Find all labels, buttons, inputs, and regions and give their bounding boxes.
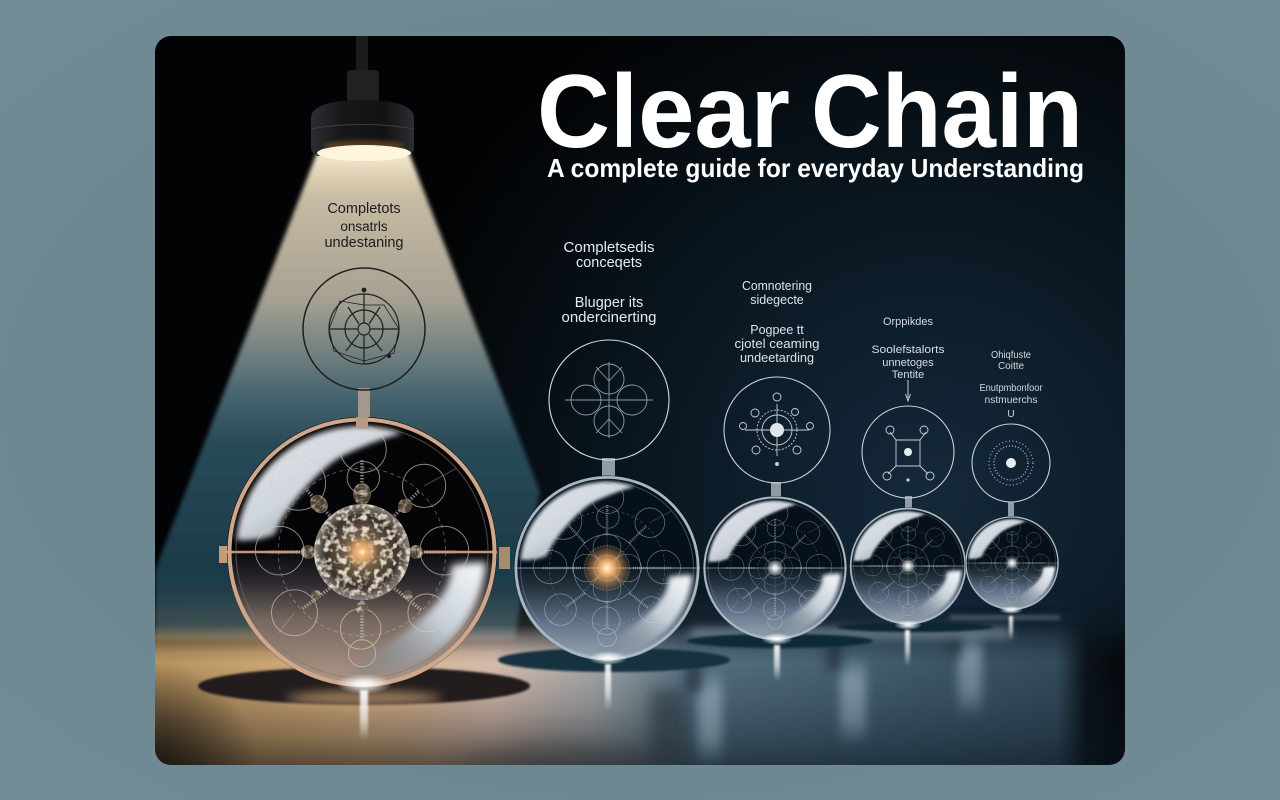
light beam	[155, 150, 540, 640]
step 1: text: onsatrls	[340, 219, 388, 234]
step 1: diagram	[303, 268, 425, 390]
step 2: text: Completsedis	[564, 240, 654, 256]
sphere 4	[850, 508, 966, 624]
step 2: diagram	[549, 340, 669, 460]
sphere 3	[703, 496, 847, 640]
step 4: arrow	[906, 380, 910, 401]
step 5: text: Enutpmbonfoor	[980, 383, 1043, 394]
step 5: diagram	[972, 424, 1050, 502]
stem connectors	[219, 388, 1014, 569]
step 2: text	[562, 240, 656, 326]
lamp collar	[347, 70, 379, 102]
subtitle: A complete guide for everyday Understanding	[547, 153, 1084, 183]
step 4: diagram	[862, 406, 954, 498]
lamp shade	[311, 100, 414, 156]
step 3: diagram	[724, 377, 830, 483]
panel: dark stage	[155, 36, 1125, 796]
step 2: text: Blugper its	[575, 295, 643, 311]
step 3: text	[734, 279, 820, 365]
step 5: text: nstmuerchs	[984, 395, 1038, 406]
step 5: text: Ohiqfuste	[991, 350, 1031, 361]
pendant lamp	[311, 36, 414, 161]
step 4: text: Tentite	[892, 369, 924, 381]
step 3: text: cjotel ceaming	[734, 337, 820, 351]
step 3: text: Pogpee tt	[750, 323, 804, 337]
sphere shadows	[198, 606, 1075, 705]
step 1: text: undestaning	[324, 235, 404, 251]
title: Clear	[537, 54, 790, 170]
step 1: text	[324, 201, 404, 251]
lamp opening	[317, 145, 411, 161]
step 4: text: unnetoges	[882, 357, 934, 369]
step 1: text: Completots	[327, 201, 401, 217]
step 2: text: ondercinerting	[562, 310, 656, 326]
step 5: text: Coitte	[998, 361, 1024, 372]
core: star	[347, 537, 377, 567]
floor	[155, 602, 1125, 765]
step 4: text: Soolefstalorts	[872, 344, 945, 356]
top coupling	[356, 417, 368, 428]
title: Chain	[811, 54, 1083, 170]
step 3: text: undeetarding	[740, 351, 814, 365]
floor glows	[336, 606, 1023, 740]
network: warm	[255, 426, 469, 667]
step 2: text: conceqets	[576, 255, 642, 271]
step 5: text	[980, 350, 1043, 420]
core: glitter ball	[314, 504, 410, 600]
title	[541, 72, 1077, 148]
step 4: text	[872, 316, 945, 381]
infographic canvas	[155, 36, 1125, 765]
sphere 2	[514, 476, 700, 660]
sphere 5	[965, 516, 1059, 610]
sphere 1: warm	[227, 417, 497, 687]
network beads	[301, 483, 423, 614]
step 5: text: U	[1007, 409, 1015, 420]
panel base	[155, 36, 1125, 765]
lamp cord	[356, 36, 368, 72]
step 4: text: Orppikdes	[883, 316, 933, 328]
step 3: text: Comnotering	[742, 279, 812, 293]
step 3: text: sidegecte	[750, 293, 804, 307]
lamp warm glow inside shade	[323, 138, 405, 148]
